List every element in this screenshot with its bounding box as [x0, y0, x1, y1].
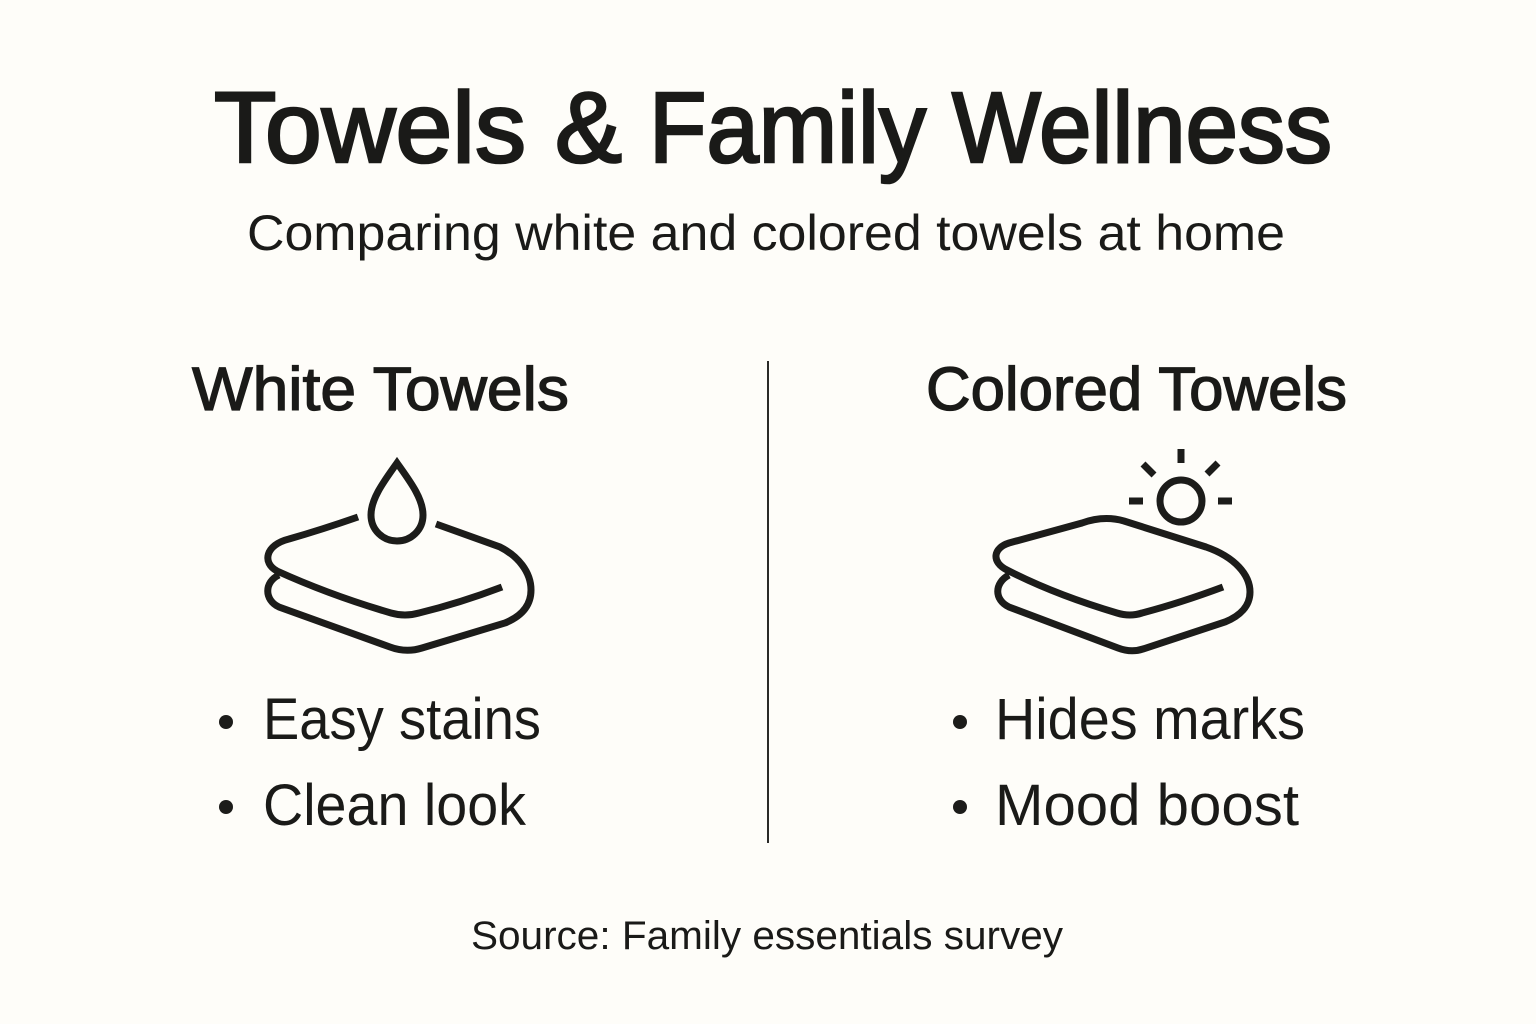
bullet: clean look: Clean look — [263, 773, 527, 838]
bullet: easy stains: Easy stains — [263, 687, 541, 752]
panel: colored towels — [926, 355, 1347, 838]
source note: Source: Family essentials survey — [471, 914, 1063, 958]
icon: towel with sun — [996, 449, 1250, 651]
title — [214, 72, 1332, 184]
heading: white towels: White Towels — [192, 355, 569, 423]
bullet: hides marks: Hides marks — [995, 687, 1305, 752]
icon: towel with water drop — [268, 463, 531, 650]
title: Towels — [214, 72, 526, 184]
bullet list: white towels — [219, 687, 541, 838]
title: & — [555, 72, 622, 184]
title: Family — [649, 72, 926, 184]
bullet: mood boost: Mood boost — [995, 773, 1299, 838]
subtitle: Comparing white and colored towels at home — [247, 205, 1285, 261]
bullet list: colored towels — [953, 687, 1305, 838]
title: Wellness — [952, 72, 1332, 184]
panel: white towels — [192, 355, 569, 838]
center divider — [767, 361, 769, 843]
heading: colored towels: Colored Towels — [926, 355, 1347, 423]
